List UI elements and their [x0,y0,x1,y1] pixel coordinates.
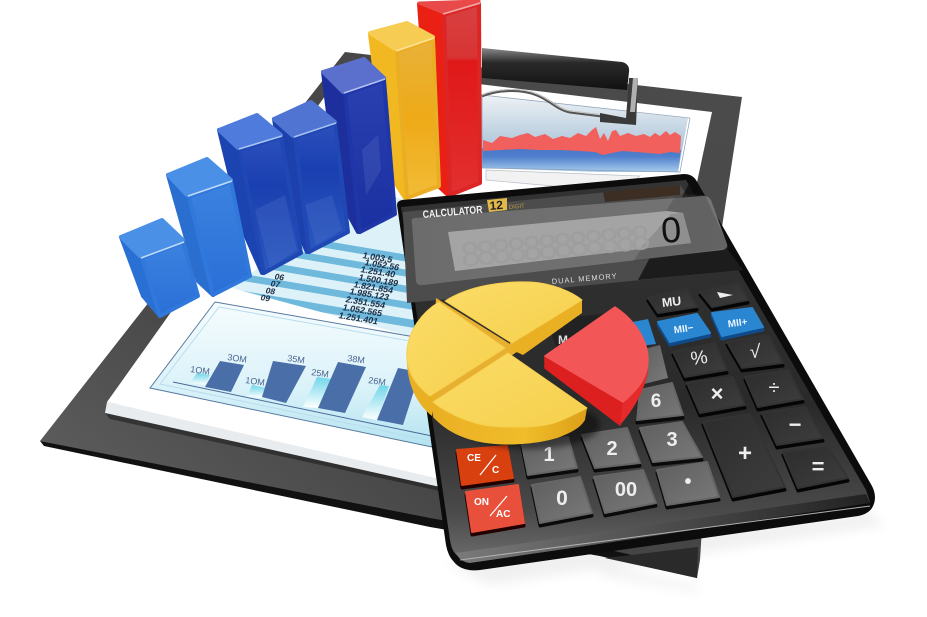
bottom yellow slice [433,353,587,444]
brand text: 12 [489,198,504,213]
function keys: % [689,347,709,370]
paper bar chart: 38M [347,353,365,365]
display panel [403,182,743,303]
table with blue rows: 1.052.56 [363,257,401,273]
number keys [522,383,719,526]
paper bar chart: 25M [311,367,329,379]
function keys: = [812,454,824,479]
number keys: 2 [606,438,618,460]
function keys: ÷ [769,377,780,399]
number keys: 0 [556,487,568,510]
table with blue rows: 06 [273,271,286,282]
paper bar chart [150,302,432,447]
red clear keys [457,446,524,535]
red clear keys: AC [496,509,510,520]
left yellow slice [407,302,505,416]
brand text: CALCULATOR [422,204,483,221]
soft shadows [445,512,885,592]
pie chart [407,282,648,449]
table with blue rows: 1.003.5 [361,250,394,265]
function keys: √ [750,342,761,363]
paper bar chart: 1OM [245,375,265,388]
function keys: MU [661,294,682,310]
pie gold base [430,298,520,408]
keys under chart: M [558,333,568,347]
red clear keys: CE [467,453,481,464]
top yellow slice [445,282,582,355]
table with blue rows: 1.052.565 [341,302,384,318]
paper bar chart: 35M [287,353,305,365]
display panel: 0 [660,209,683,251]
paper bar chart: 1OM [190,364,210,377]
blue bar 5 [323,59,395,232]
table with blue rows: 1.251.401 [337,310,380,326]
clipboard board [40,52,742,578]
table with blue rows: 08 [264,285,277,296]
number keys: 6 [651,391,661,412]
solar panel [603,185,680,202]
red bar [419,1,480,195]
function keys: MII+ [727,317,748,330]
table with blue rows: 2.351.554 [344,294,387,310]
table with blue rows: 1.985.123 [348,286,391,302]
blue bar 3 [219,115,301,273]
table with blue rows: 07 [269,278,282,289]
table with blue rows: 1.251.40 [359,264,397,280]
function keys: + [738,440,752,467]
red slice [545,307,648,425]
paper bar chart: 26M [368,375,386,387]
red clear keys: C [492,465,499,476]
blue bar 1 [121,220,198,316]
calculator body [397,174,875,570]
number keys: 00 [615,479,637,501]
yellow bar [370,23,439,198]
table with blue rows: 09 [259,292,272,303]
function keys: × [711,381,723,406]
blue bar 4 [274,102,348,252]
blue bar 2 [168,159,250,295]
clipboard clip [482,48,638,125]
function keys [648,283,848,500]
keys under chart [545,312,668,385]
brand text: DIGIT [509,204,525,211]
calculator [397,174,875,570]
table with blue rows: 1.500.189 [357,272,400,288]
brand text: DUAL MEMORY [551,271,617,286]
number keys: • [684,471,692,493]
function keys: MII− [673,323,694,336]
bar graph [121,1,480,316]
number keys: 1 [543,444,555,466]
display panel: 888888888888 [459,218,652,275]
function keys: − [789,412,801,437]
table with blue rows [232,198,414,336]
paper bar chart: 3OM [227,352,247,365]
table with blue rows: 1.821.854 [352,279,395,295]
number keys: 3 [666,429,678,451]
red clear keys: ON [474,497,489,508]
stock chart [482,95,690,192]
pie shadow [460,401,600,449]
paper stack [105,68,712,491]
brand text [422,198,617,286]
